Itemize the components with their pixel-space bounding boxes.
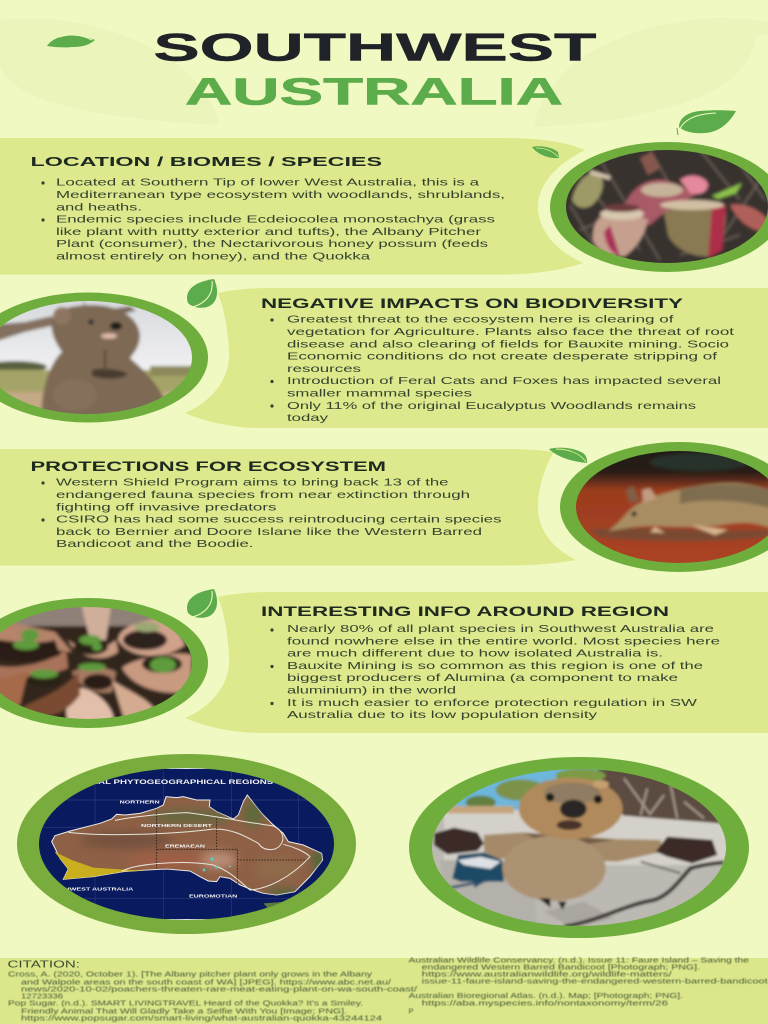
citations: left column xyxy=(8,970,418,1023)
text block: negative impacts bullets: smaller mammal species xyxy=(287,388,472,400)
icon: leaf over interesting info panel xyxy=(186,589,217,618)
text block: protections bullets: back to Bernier and Doore Islane like the Western Barred xyxy=(56,526,482,538)
text block: location bullets: Endemic species include Ecdeiocolea monostachya (grass xyxy=(56,214,495,226)
text block: negative impacts bullets: disease and also clearing of fields for Bauxite mining. Socio xyxy=(287,338,729,350)
citations: right column: Australian Bioregional Atlas. (n.d.). Map; [Photograph; PNG]. xyxy=(408,991,683,1000)
panel: interesting info around region xyxy=(185,592,768,733)
citations: left column: Friendly Animal That Will Gladly Take a Selfie With You [Image; PNG]. xyxy=(21,1006,347,1015)
text block: protections bullets xyxy=(41,477,502,550)
photo: western barred bandicoot xyxy=(560,442,768,572)
text block: negative impacts bullets: Economic conditions do not create desperate stripping of xyxy=(287,351,717,363)
text block: location bullets: and heaths. xyxy=(56,201,142,213)
citations: left column: Cross, A. (2020, October 1). [The Albany pitcher plant only grows in the Albany xyxy=(8,970,372,979)
photo: hands holding seedlings xyxy=(0,598,208,728)
citation heading: CITATION: xyxy=(8,960,80,971)
text block: protections bullets: fighting off invasive predators xyxy=(56,501,276,513)
citations: left column: Pop Sugar. (n.d.). SMART LIVINGTRAVEL Heard of the Quokka? It's a Smiley. xyxy=(8,998,363,1007)
text block: location bullets: almost entirely on honey), and the Quokka xyxy=(56,250,370,262)
panel: negative impacts on biodiversity xyxy=(185,288,768,428)
photo: smiling quokka xyxy=(0,292,208,422)
citations: right column: Australian Wildlife Conservancy. (n.d.). Issue 11: Faure Island – Saving the xyxy=(408,955,749,964)
text block: interesting info bullets: aluminium) in the world xyxy=(287,684,456,696)
heading: protections: PROTECTIONS FOR ECOSYSTEM xyxy=(30,459,386,474)
text block: interesting info bullets: biggest producers of Alumina (a component to make xyxy=(287,672,678,684)
citations: left column: https://www.popsugar.com/smart-living/what-australian-quokka-43244124 xyxy=(21,1014,382,1023)
text block: location bullets: Located at Southern Tip of lower West Australia, this is a xyxy=(56,177,479,189)
panel: protections for ecosystem xyxy=(0,448,587,566)
map labels: SOUTHWEST AUSTRALIA xyxy=(45,886,134,892)
heading: interesting info: INTERESTING INFO AROUND REGION xyxy=(261,604,669,619)
map labels: EREMAEAN xyxy=(165,844,206,850)
citations: right column: issue-11-faure-island-saving-the-endangered-western-barred-bandicoot xyxy=(422,977,768,986)
citations: left column: news/2020-10-02/poachers-threaten-rare-meat-eating-plant-on-wa-south-coast/ xyxy=(21,984,418,993)
map labels: NORTHERN xyxy=(120,799,160,805)
heading: negative impacts: NEGATIVE IMPACTS ON BIODIVERSITY xyxy=(261,296,683,311)
citations: right column: https://www.australianwildlife.org/wildlife-matters/ xyxy=(422,969,673,978)
text block: location bullets: Mediterranean type ecosystem with woodlands, shrublands, xyxy=(56,189,505,201)
photo: phytogeographical regions map xyxy=(17,754,356,934)
heading: location: LOCATION / BIOMES / SPECIES xyxy=(30,154,383,169)
icon: small panel leaf xyxy=(532,146,559,158)
photo: quokka selfie xyxy=(409,757,749,938)
map of Australia xyxy=(43,772,337,918)
citations: left column: 12723336 xyxy=(21,991,63,1000)
text block: negative impacts bullets: vegetation for Agriculture. Plants also face the threat of root xyxy=(287,326,734,338)
text block: negative impacts bullets: resources xyxy=(287,363,361,375)
title: AUSTRALIA xyxy=(185,72,563,114)
text block: interesting info bullets: It is much easier to enforce protection regulation in SW xyxy=(287,697,697,709)
text block: interesting info bullets: found nowhere else in the entire world. Most species here xyxy=(287,635,720,647)
map white edges xyxy=(164,768,208,920)
text block: protections bullets: endangered fauna species from near extinction through xyxy=(56,489,470,501)
map labels: FLORAL PHYTOGEOGRAPHICAL REGIONS xyxy=(72,779,274,786)
map labels: NORTHERN DESERT xyxy=(141,823,212,829)
text block: location bullets: like plant with nutty exterior and tufts), the Albany Pitcher xyxy=(56,226,482,238)
panel: location biomes species xyxy=(0,138,585,275)
text block: interesting info bullets: are much different due to how isolated Australia is. xyxy=(287,648,663,660)
text block: protections bullets: Bandicoot and the Boodie. xyxy=(56,538,254,550)
citations: right column xyxy=(408,955,768,1015)
icon: leaf over negative impacts panel xyxy=(186,279,217,308)
text block: location bullets xyxy=(41,177,505,262)
map labels xyxy=(66,780,273,898)
text block: negative impacts bullets: Greatest threat to the ecosystem here is clearing of xyxy=(287,314,674,326)
title: SOUTHWEST xyxy=(153,27,597,70)
icon: panel leaf xyxy=(549,448,587,463)
text block: location bullets: Plant (consumer), the Nectarivorous honey possum (feeds xyxy=(56,238,488,250)
citations: left column: and Walpole areas on the south coast of WA] [JPEG]. https://www.abc.net.au/ xyxy=(21,977,392,986)
panel: citation xyxy=(0,955,768,1024)
icon: large leaf above first photo xyxy=(677,110,736,135)
citations: right column: P xyxy=(408,1006,414,1015)
text block: negative impacts bullets: Only 11% of the original Eucalyptus Woodlands remains xyxy=(287,400,696,412)
citations: right column: endangered Western Barred Bandicoot [Photograph; PNG]. xyxy=(422,962,700,971)
decorative background leaves xyxy=(0,18,768,127)
text block: protections bullets: CSIRO has had some success reintroducing certain species xyxy=(56,514,502,526)
text block: negative impacts bullets: Introduction of Feral Cats and Foxes has impacted several xyxy=(287,375,721,387)
map labels: EUROMOTIAN xyxy=(189,894,238,900)
text block: protections bullets: Western Shield Program aims to bring back 13 of the xyxy=(56,477,449,489)
citations: right column: https://aba.myspecies.info/nontaxonomy/term/26 xyxy=(422,998,668,1007)
text block: interesting info bullets: Australia due to its low population density xyxy=(287,709,598,721)
text block: negative impacts bullets xyxy=(270,314,734,424)
text block: negative impacts bullets: today xyxy=(287,412,329,424)
text block: interesting info bullets: Bauxite Mining is so common as this region is one of the xyxy=(287,660,703,672)
title xyxy=(153,27,597,114)
text block: interesting info bullets xyxy=(270,623,720,721)
photo: albany pitcher plant xyxy=(550,142,768,272)
icon: top left leaf xyxy=(47,35,95,47)
text block: interesting info bullets: Nearly 80% of all plant species in Southwest Australia are xyxy=(287,623,714,635)
